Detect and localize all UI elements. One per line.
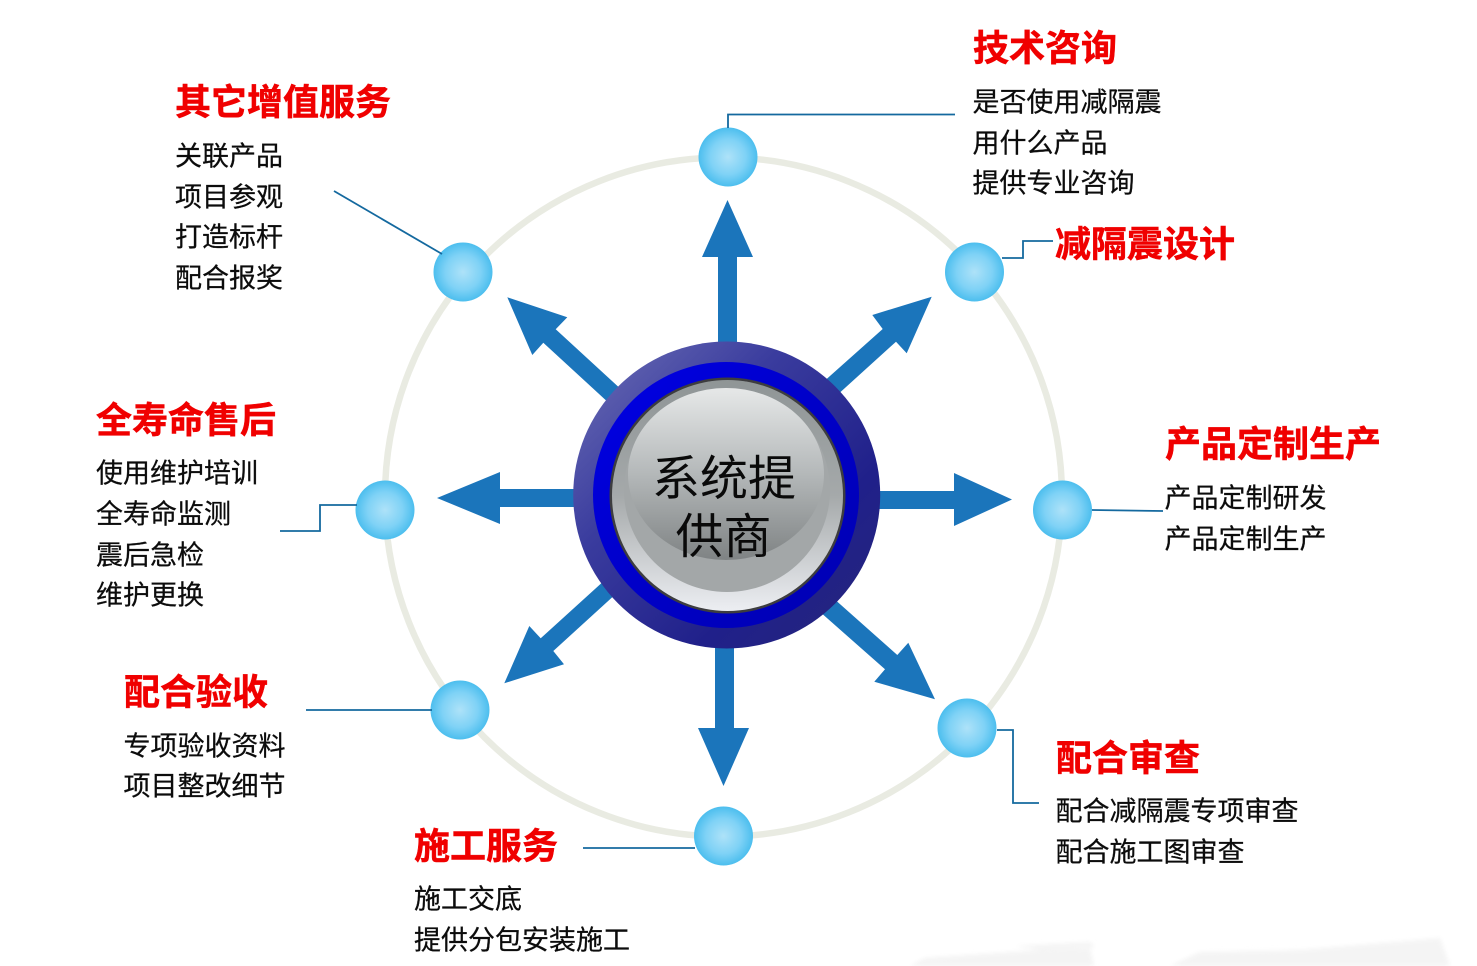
node: 配合验收 <box>430 680 490 740</box>
list: 项目参观 <box>175 182 283 212</box>
list: 提供专业咨询 <box>972 168 1134 198</box>
list: 配合减隔震专项审查 <box>1056 796 1298 826</box>
connector lines <box>280 114 1163 848</box>
panel: 产品定制生产 <box>1164 424 1381 554</box>
list: 项目整改细节 <box>124 772 286 802</box>
list: 配合施工图审查 <box>1056 838 1244 868</box>
outer ring <box>385 158 1062 836</box>
panel: 其它增值服务 <box>175 82 391 294</box>
arrow: upper left <box>507 297 624 405</box>
center label: 供商 <box>675 511 772 564</box>
node: 配合审查 <box>938 698 996 758</box>
node: 技术咨询 <box>698 128 758 186</box>
list: 配合报奖 <box>175 264 283 294</box>
list: 专项验收资料 <box>124 732 286 762</box>
list: 产品定制研发 <box>1164 484 1326 514</box>
arrow: right <box>875 473 1012 526</box>
node: 全寿命售后 <box>356 480 414 540</box>
heading: 其它增值服务 <box>175 82 391 122</box>
panel: 配合审查 <box>1056 738 1298 868</box>
list: 关联产品 <box>175 142 283 172</box>
heading: 施工服务 <box>414 826 558 866</box>
list: 产品定制生产 <box>1164 524 1326 554</box>
arrows <box>437 200 1012 786</box>
arrow: left <box>437 472 580 524</box>
list: 全寿命监测 <box>96 500 231 530</box>
arrow: up <box>702 200 753 350</box>
panel: 施工服务 <box>414 826 630 956</box>
heading: 全寿命售后 <box>96 400 276 440</box>
list: 打造标杆 <box>175 222 283 252</box>
nodes <box>356 128 1092 866</box>
heading: 减隔震设计 <box>1055 224 1235 264</box>
list: 震后急检 <box>96 540 204 570</box>
node: 施工服务 <box>694 806 753 866</box>
node: 减隔震设计 <box>945 242 1004 302</box>
list: 使用维护培训 <box>96 458 258 488</box>
heading: 产品定制生产 <box>1165 424 1381 464</box>
node: 产品定制生产 <box>1033 480 1092 540</box>
arrow: upper right <box>821 297 932 397</box>
central button <box>573 342 880 648</box>
list: 维护更换 <box>96 580 204 610</box>
panel: 技术咨询 <box>972 28 1162 198</box>
list: 施工交底 <box>414 884 522 914</box>
node: 其它增值服务 <box>434 242 492 302</box>
list: 用什么产品 <box>972 128 1108 158</box>
center label: 系统提 <box>652 453 796 506</box>
heading: 技术咨询 <box>973 28 1117 68</box>
arrow: lower right <box>819 597 935 699</box>
panel: 配合验收 <box>124 672 286 802</box>
heading: 配合验收 <box>124 672 268 712</box>
arrow: down <box>698 640 749 786</box>
list: 提供分包安装施工 <box>414 926 630 956</box>
arrow: lower left <box>504 579 618 683</box>
heading: 配合审查 <box>1056 738 1200 778</box>
list: 是否使用减隔震 <box>972 88 1162 118</box>
panel: 全寿命售后 <box>96 400 276 610</box>
background brush smudge <box>910 938 1450 966</box>
